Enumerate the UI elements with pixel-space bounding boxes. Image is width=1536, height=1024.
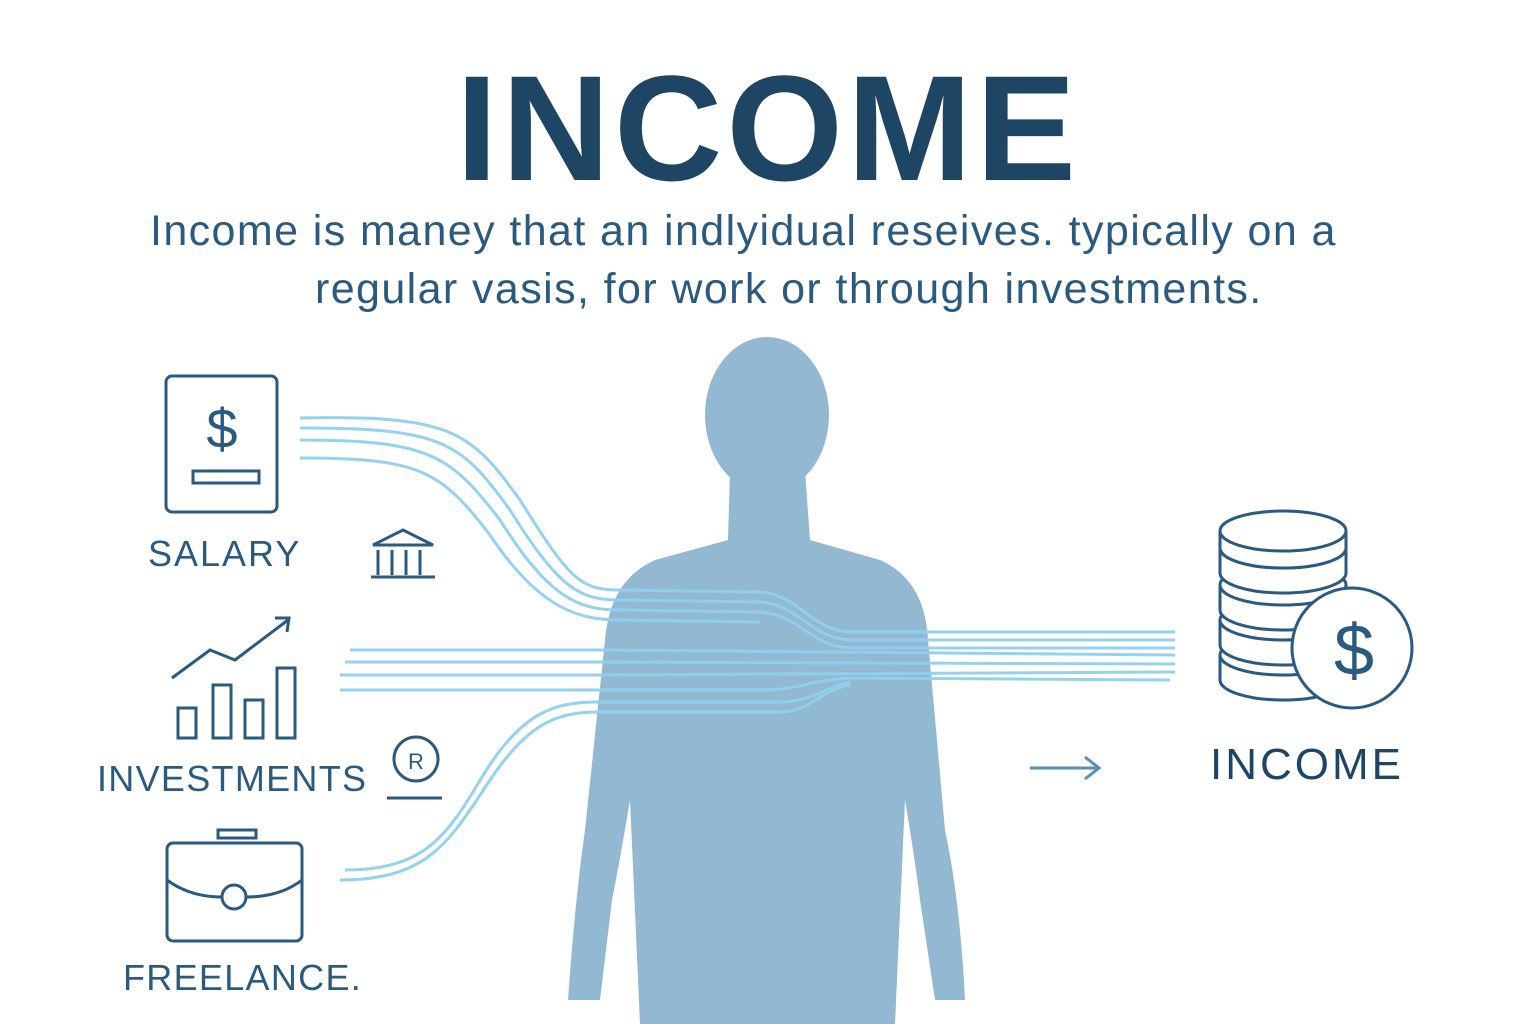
icon: salary document: $ (206, 397, 238, 460)
label: freelance: FREELANCE. (123, 957, 362, 998)
title: INCOME (456, 44, 1080, 212)
icon: salary document (166, 376, 277, 512)
icon: briefcase (167, 830, 302, 941)
icon: small badge: R (408, 749, 424, 774)
person silhouette (568, 337, 965, 1024)
flow lines (300, 418, 1175, 880)
label: income: INCOME (1210, 740, 1404, 789)
icon: investments chart (172, 618, 295, 738)
label: salary: SALARY (148, 533, 301, 574)
icon: bank (371, 530, 435, 577)
icon: small badge (387, 737, 442, 798)
subtitle: regular vasis, for work or through investments. (315, 265, 1263, 313)
label: investments: INVESTMENTS (97, 758, 367, 799)
subtitle (150, 207, 1337, 313)
arrow (1030, 757, 1099, 779)
icon: coins: $ (1334, 611, 1374, 691)
icon: coins (1220, 511, 1412, 708)
subtitle: Income is maney that an indlyidual reseives. typically on a (150, 207, 1337, 255)
